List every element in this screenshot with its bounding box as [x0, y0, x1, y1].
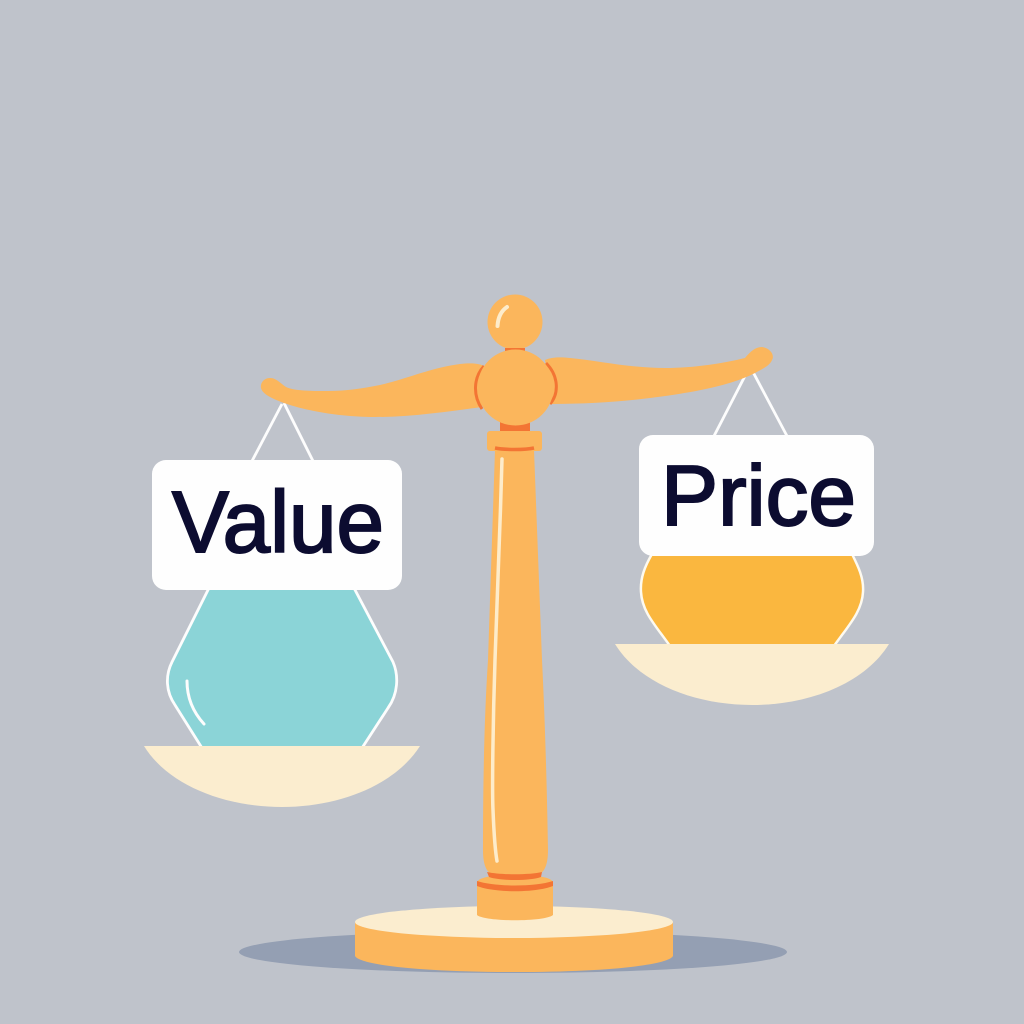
- teal weight: [167, 588, 397, 748]
- left pan: [144, 746, 420, 807]
- label: Price: Price: [661, 449, 856, 544]
- left hanger: Value: [144, 460, 420, 807]
- amber weight: [641, 554, 863, 646]
- label: Price: [639, 435, 874, 556]
- right hanger: Price: [615, 435, 889, 705]
- label: Value: [152, 460, 402, 590]
- balance beam: [261, 347, 773, 417]
- ground shadow: [239, 931, 787, 973]
- right pan: [615, 644, 889, 705]
- right strings: [714, 372, 787, 436]
- column: [477, 422, 553, 920]
- left strings: [252, 403, 313, 461]
- label: Value: Value: [172, 474, 384, 571]
- pivot and top finial: [475, 294, 556, 426]
- base platform: [355, 906, 673, 972]
